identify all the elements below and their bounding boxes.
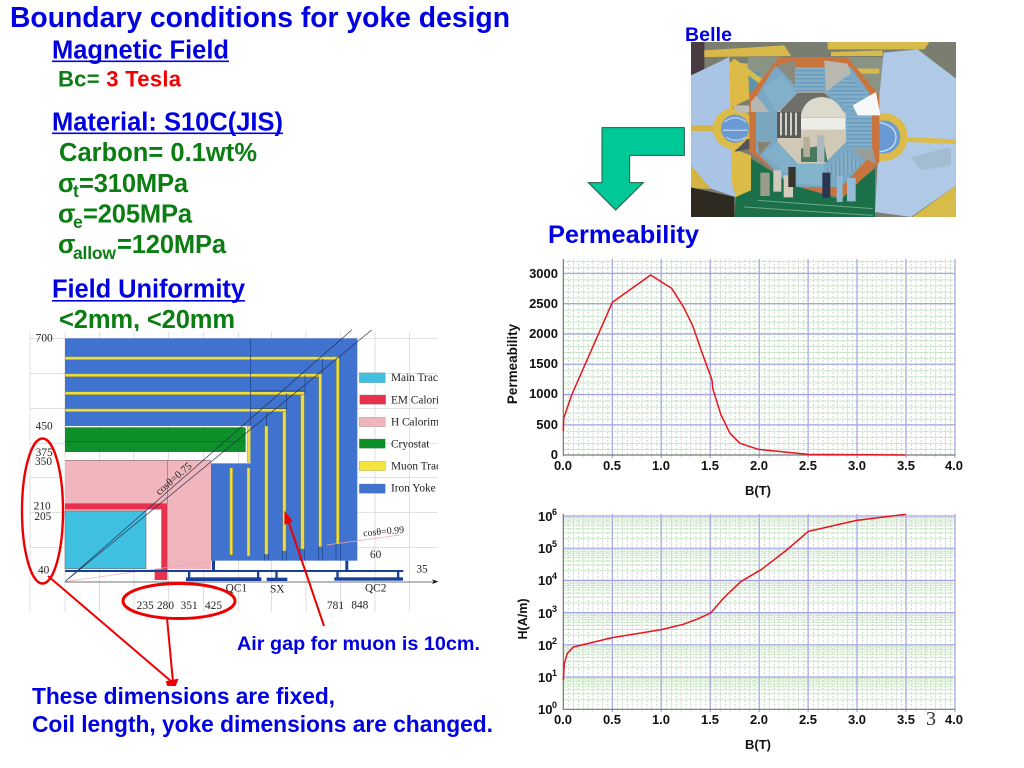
dimension labels: 450: [36, 420, 53, 432]
note: fixed dimensions: [32, 683, 493, 737]
text: material properties: [58, 139, 257, 263]
y axis labels: 10: [538, 702, 552, 717]
dimension labels: 848: [351, 599, 369, 611]
dimension labels: 375: [36, 447, 53, 459]
dimension labels: 210: [34, 500, 51, 512]
y axis labels: 500: [536, 417, 558, 432]
axis: [65, 579, 438, 584]
y axis labels: 2500: [529, 296, 558, 311]
dimension labels: QC2: [365, 582, 387, 594]
y axis labels: 3: [552, 604, 557, 614]
permeability curve: [563, 275, 905, 455]
bright reflection: [853, 92, 880, 115]
dimension labels: 351: [181, 600, 198, 612]
x axis labels: 4.0: [945, 458, 963, 473]
hadron calorimeter: [65, 460, 211, 569]
dimension labels: 781: [327, 600, 344, 612]
x axis labels: 2.0: [750, 712, 768, 727]
text: material properties: Carbon= 0.1wt%: [59, 139, 257, 167]
x axis labels: 3.0: [848, 712, 866, 727]
y axis labels: 1500: [529, 356, 558, 371]
detector cross-section diagram: [20, 330, 448, 618]
x axis labels: [554, 458, 963, 473]
text: material properties: σ: [58, 200, 75, 228]
x axis labels: 3.5: [897, 458, 915, 473]
chart grid: [563, 259, 955, 458]
y axis labels: 5: [552, 539, 557, 549]
label: Belle: Belle: [685, 24, 732, 46]
text: material properties: e: [73, 212, 83, 232]
legend: H Calorime: [391, 416, 444, 428]
x axis labels: 0.5: [603, 712, 621, 727]
heading: magnetic field: Magnetic Field: [52, 36, 229, 64]
x axis labels: 2.5: [799, 458, 817, 473]
text: material properties: =120MPa: [117, 231, 227, 259]
legend: EM Calorim: [391, 394, 448, 406]
text: material properties: allow: [73, 243, 116, 263]
dimension labels: cosθ=0.99: [363, 525, 405, 539]
x axis title: B(T): [745, 737, 771, 752]
dimension labels: 60: [370, 549, 382, 561]
main tracker: [65, 511, 146, 569]
heading: field uniformity: Field Uniformity: [52, 276, 246, 304]
dimension labels: 205: [34, 511, 52, 523]
chart grid: [563, 514, 955, 712]
floor: [734, 159, 875, 217]
x axis labels: [554, 712, 963, 727]
y axis labels: 4: [552, 571, 557, 581]
x axis labels: 1.5: [701, 458, 719, 473]
red ellipse: radial dimensions: [22, 438, 63, 584]
y axis labels: 0: [552, 700, 557, 710]
red ellipse: axial dimensions: [123, 584, 235, 618]
x axis labels: 1.0: [652, 712, 670, 727]
centre opening: [778, 92, 846, 164]
dimension labels: 35: [416, 564, 428, 576]
H curve: [563, 514, 906, 680]
muon tracker bars: [65, 357, 339, 556]
y axis labels: 6: [552, 507, 557, 517]
y axis labels: 2: [552, 636, 557, 646]
dimension labels: 40: [38, 564, 50, 576]
y axis labels: 10: [538, 541, 552, 556]
iron yoke: [65, 338, 357, 561]
x axis labels: 3.5: [897, 712, 915, 727]
heading: material: Material: S10C(JIS): [52, 108, 283, 136]
chart: H vs B: [516, 507, 963, 752]
text: material properties: σ: [58, 170, 75, 198]
y axis labels: [538, 507, 557, 717]
x axis labels: 0.5: [603, 458, 621, 473]
y axis labels: 0: [551, 447, 558, 462]
y axis title: H(A/m): [516, 599, 530, 639]
chart: permeability vs B: [505, 259, 963, 498]
y axis labels: 3000: [529, 266, 558, 281]
note: fixed dimensions: Coil length, yoke dimensions are changed.: [32, 711, 493, 737]
dimension labels: cosθ=0.75: [154, 461, 194, 498]
title: Boundary conditions for yoke design: [10, 1, 510, 33]
x axis labels: 2.5: [799, 712, 817, 727]
text: material properties: =205MPa: [83, 200, 193, 228]
y axis labels: 10: [538, 573, 552, 588]
x axis labels: 1.5: [701, 712, 719, 727]
arrow to muon air gap: [285, 512, 324, 626]
legend: Cryostat: [391, 438, 430, 450]
x axis title: B(T): [745, 483, 771, 498]
legend: Iron Yoke: [391, 483, 436, 495]
x axis labels: 0.0: [554, 712, 572, 727]
orange octagon: [749, 57, 879, 198]
y axis title: Permeability: [505, 323, 520, 404]
dimension labels: SX: [270, 584, 284, 596]
y axis labels: 10: [538, 670, 552, 685]
x axis labels: 0.0: [554, 458, 572, 473]
dimension labels: 425: [205, 600, 222, 612]
callout: air gap: Air gap for muon is 10cm.: [237, 633, 480, 655]
photo: Belle detector: [691, 42, 956, 217]
page number: 3: [926, 708, 936, 730]
left endcap: [691, 57, 736, 197]
cos theta lines: [65, 330, 372, 582]
dimension labels: 280: [157, 600, 174, 612]
right endcap: [875, 49, 956, 217]
arrows to fixed dimensions note: [48, 576, 177, 685]
text: material properties: σ: [58, 231, 75, 259]
x axis labels: 4.0: [945, 712, 963, 727]
detector modules: [756, 67, 871, 187]
beam support structure: [65, 561, 403, 581]
y axis labels: 1: [552, 668, 557, 678]
dimension labels: 350: [35, 456, 52, 468]
y axis labels: 10: [538, 606, 552, 621]
legend: Muon Track: [391, 460, 447, 472]
text: Bc value: Bc= 3 Tesla: [58, 66, 182, 92]
text: uniformity values: <2mm, <20mm: [59, 306, 235, 334]
y axis labels: 2000: [529, 326, 558, 341]
x axis labels: 2.0: [750, 458, 768, 473]
cryostat: [65, 427, 246, 452]
x axis labels: 3.0: [848, 458, 866, 473]
text: material properties: t: [73, 181, 79, 201]
dimension labels: 235: [137, 600, 154, 612]
y axis labels: 10: [538, 509, 552, 524]
y axis labels: 1000: [529, 386, 558, 401]
y axis labels: 10: [538, 638, 552, 653]
dimension labels: QC1: [226, 583, 247, 595]
legend: Main Track: [391, 372, 444, 384]
note: fixed dimensions: These dimensions are fixed,: [32, 683, 335, 709]
dimension labels: [34, 333, 428, 612]
y axis labels: [529, 266, 558, 462]
arrow: green bent arrow: [588, 128, 684, 210]
heading: permeability: Permeability: [548, 221, 699, 249]
people: [760, 135, 856, 202]
EM calorimeter: [65, 503, 167, 580]
text: material properties: =310MPa: [79, 170, 189, 198]
legend: [359, 372, 438, 494]
x axis labels: 1.0: [652, 458, 670, 473]
dimension labels: 700: [36, 333, 53, 345]
